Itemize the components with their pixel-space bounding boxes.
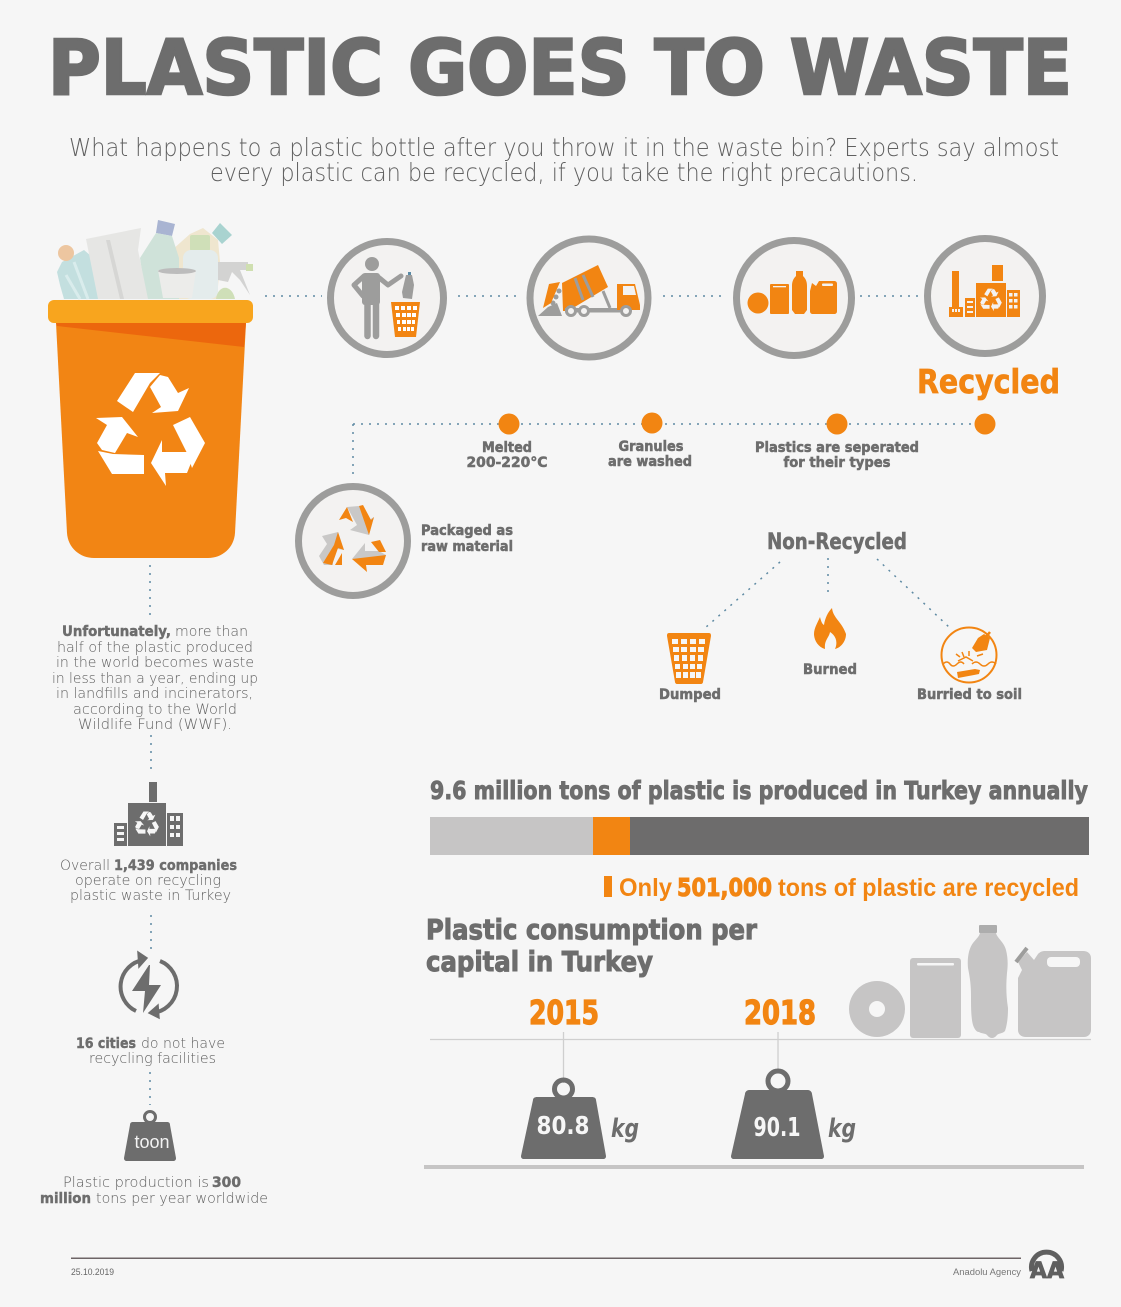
- text block: production: [40, 1175, 268, 1207]
- icon: grey recycling factory: [114, 782, 183, 846]
- text block: waste fact: in the world becomes waste: [56, 655, 254, 671]
- footer rule: [71, 1258, 1021, 1259]
- text block: waste fact: Wildlife Fund (WWF).: [78, 717, 232, 733]
- label: melted: 200-220°C: [466, 455, 548, 471]
- year label: 2018: 2018: [744, 993, 816, 1032]
- label: burned: Burned: [803, 662, 857, 678]
- bar chart: recycled share: [430, 817, 1089, 855]
- step icon: packaged raw material: [298, 486, 408, 596]
- intro text: [69, 133, 1059, 187]
- label: plastics separated: Plastics are seperated: [755, 440, 919, 456]
- label: granules: are washed: [608, 454, 692, 470]
- text block: production: Plastic production is: [63, 1175, 209, 1191]
- text block: waste fact: more than: [175, 624, 248, 640]
- icon: weight toon: toon: [134, 1132, 170, 1152]
- connector lines: [150, 296, 985, 1105]
- label: dumped: Dumped: [659, 687, 721, 703]
- label: packaged as raw material: [421, 523, 513, 555]
- text block: waste fact: in landfills and incinerators,: [56, 686, 253, 702]
- process dots: [498, 412, 996, 434]
- step icon: person throwing bottle into basket: [330, 242, 444, 354]
- weight: 2015 value: kg: [611, 1114, 639, 1144]
- weight: 2018 value: 90.1: [754, 1113, 800, 1143]
- icons: grey plastic items on shelf: [849, 925, 1091, 1038]
- label: packaged as raw material: Packaged as: [421, 523, 513, 539]
- text block: companies: 1,439 companies: [114, 858, 237, 874]
- text block: production: million: [40, 1191, 91, 1207]
- weight: 2018 value: [731, 1071, 856, 1159]
- text block: companies: Overall: [60, 858, 110, 874]
- callout: recycled tons: tons of plastic are recycled: [778, 874, 1079, 902]
- year label: 2015: 2015: [529, 993, 599, 1032]
- heading: consumption per capita: capital in Turkey: [426, 945, 653, 978]
- weight: 2018 value: kg: [828, 1114, 856, 1144]
- shelf and hanger lines: [430, 1032, 1091, 1083]
- icon: dumped basket: [667, 633, 711, 684]
- text block: waste fact: Unfortunately,: [62, 624, 171, 640]
- text block: waste fact: in less than a year, ending up: [52, 671, 258, 687]
- logo: Anadolu Agency: AA: [1030, 1259, 1064, 1284]
- text block: cities: [76, 1036, 225, 1067]
- label: granules: Granules: [618, 439, 684, 455]
- text block: companies: [60, 858, 237, 904]
- step icon: recycling factory: [928, 238, 1042, 354]
- text block: companies: plastic waste in Turkey: [70, 888, 231, 904]
- text block: production: tons per year worldwide: [96, 1191, 268, 1207]
- callout: recycled tons: 501,000: [677, 873, 772, 902]
- icon: energy bolt cycle: [121, 952, 177, 1018]
- callout: recycled tons: Only: [619, 874, 672, 902]
- icon: white recycling symbol: [96, 373, 205, 486]
- label: plastics separated: [755, 440, 919, 471]
- text block: production: 300: [212, 1175, 241, 1191]
- callout: recycled tons: [604, 873, 1079, 902]
- text block: companies: operate on recycling: [75, 873, 221, 889]
- icon: buried to soil: [942, 628, 996, 682]
- icon: flame: [814, 608, 846, 649]
- text block: cities: recycling facilities: [89, 1051, 216, 1067]
- heading: consumption per capita: Plastic consumption per: [426, 913, 757, 946]
- text block: waste fact: half of the plastic produced: [57, 640, 253, 656]
- label: melted: Melted: [482, 440, 532, 456]
- icon: recycling bin with plastic waste: [48, 220, 253, 558]
- text block: waste fact: [52, 624, 258, 733]
- label: granules: [608, 439, 692, 470]
- label: plastics separated: for their types: [784, 455, 890, 471]
- label: melted: [466, 440, 548, 471]
- ground line: [424, 1165, 1084, 1169]
- step icon: sorted plastic types: [736, 240, 852, 356]
- heading: consumption per capita: [426, 913, 757, 978]
- label: buried to soil: Burried to soil: [917, 687, 1022, 703]
- heading: Non-Recycled: Non-Recycled: [767, 530, 907, 555]
- step icon: garbage truck: [530, 239, 648, 357]
- icon: weight toon: [124, 1112, 176, 1161]
- footer credit: Anadolu Agency: [953, 1267, 1022, 1277]
- text block: cities: do not have: [141, 1036, 225, 1052]
- weight: 2015 value: 80.8: [536, 1111, 590, 1140]
- heading: Recycled: Recycled: [917, 362, 1060, 401]
- weight: 2015 value: [521, 1080, 639, 1159]
- intro text: every plastic can be recycled, if you take the right precautions.: [210, 158, 918, 187]
- text block: waste fact: according to the World: [73, 702, 237, 718]
- label: packaged as raw material: raw material: [421, 539, 513, 555]
- title: PLASTIC GOES TO WASTE: [48, 23, 1072, 112]
- footer date: 25.10.2019: [71, 1267, 114, 1277]
- text block: cities: 16 cities: [76, 1036, 136, 1052]
